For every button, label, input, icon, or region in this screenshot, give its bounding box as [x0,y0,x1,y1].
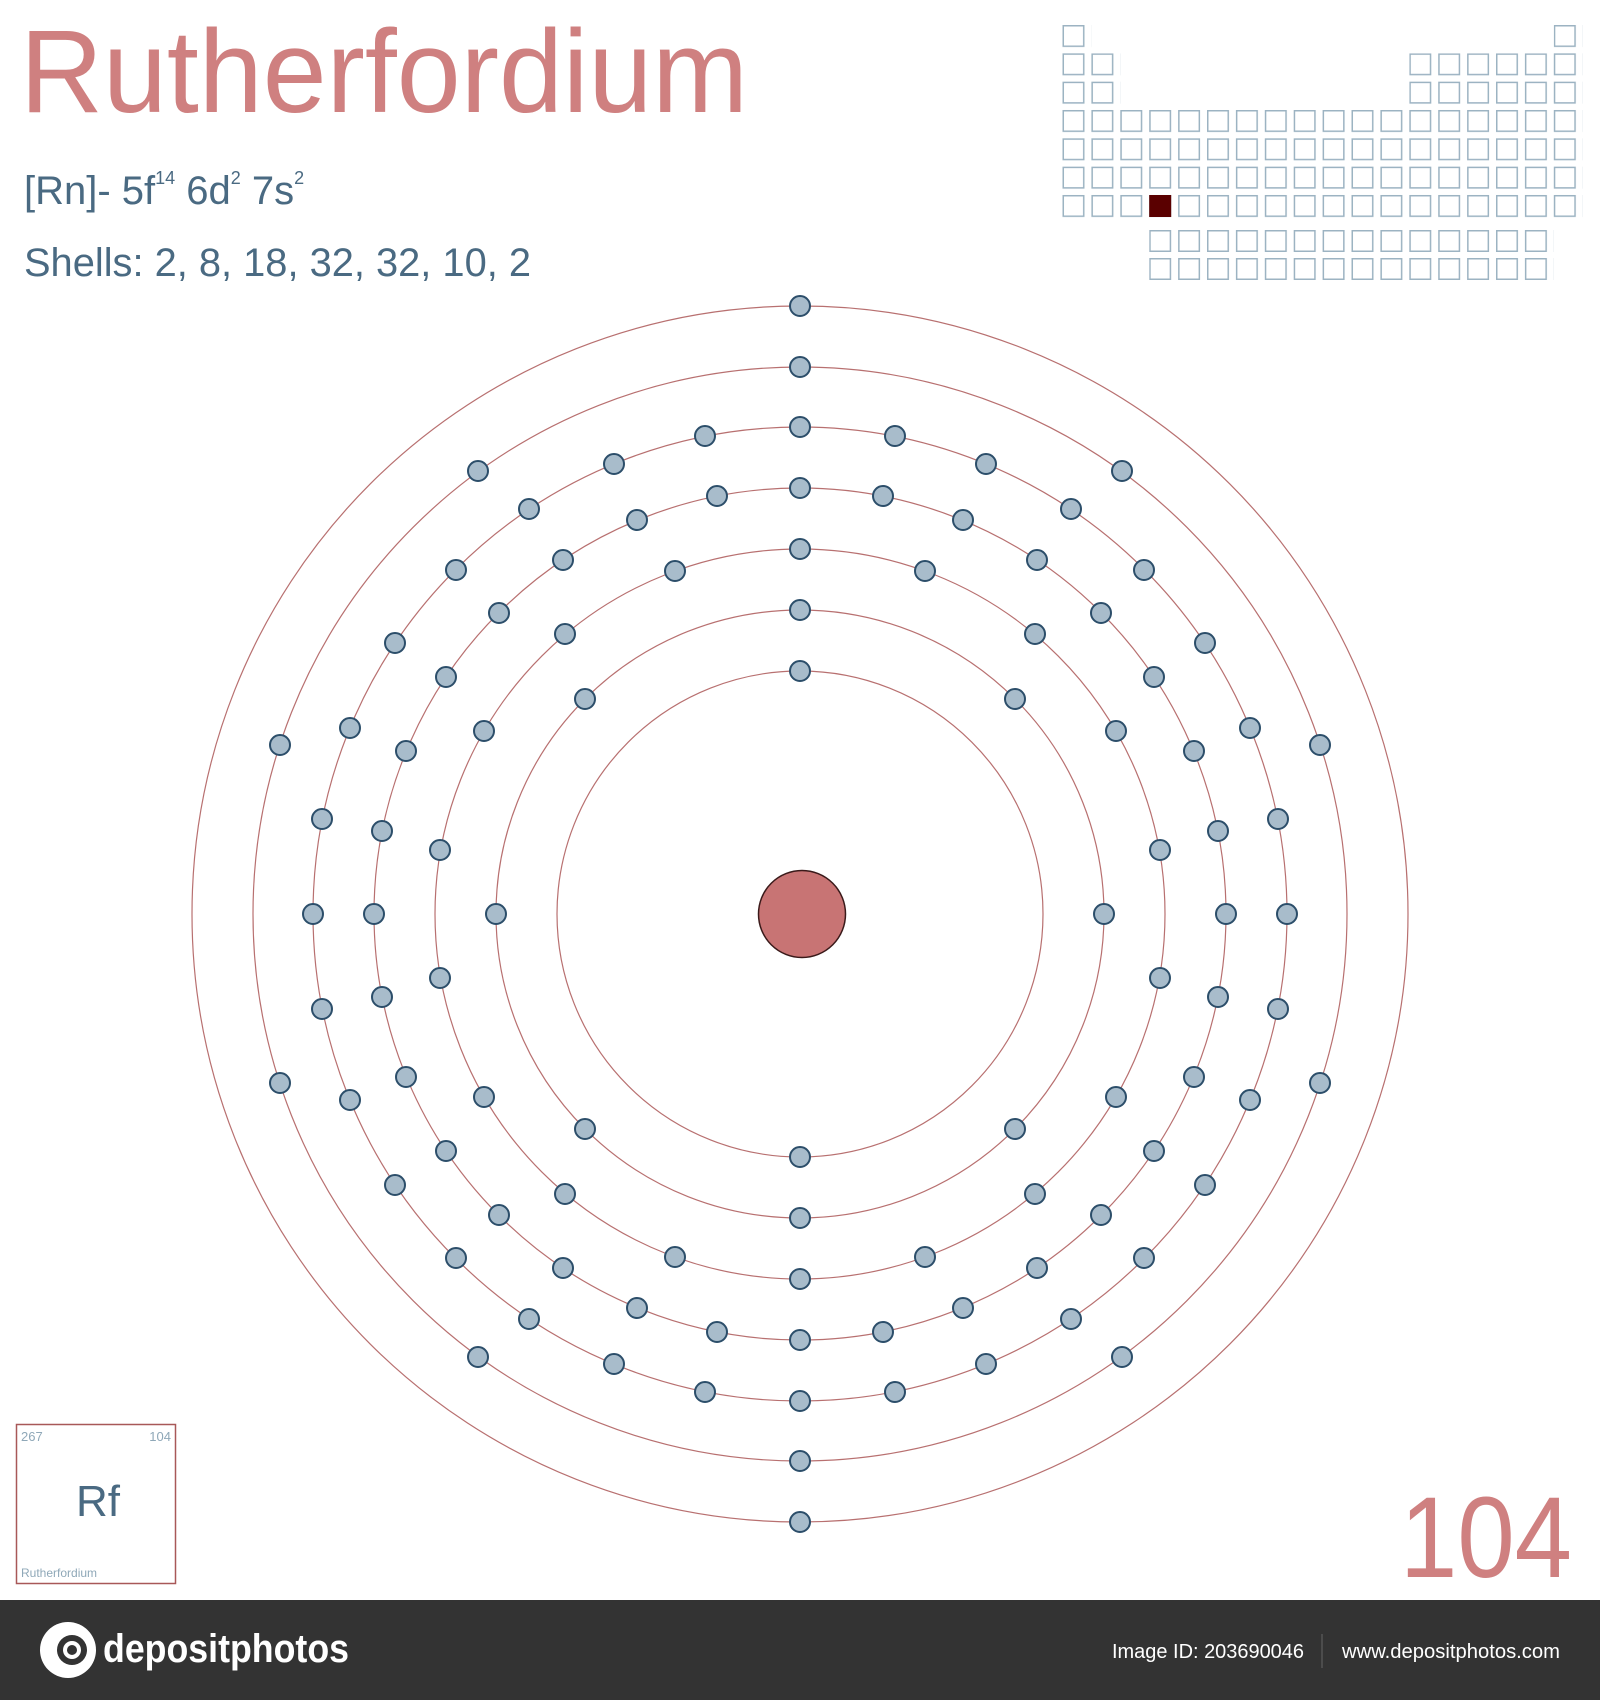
nucleus [758,870,846,958]
element tile: Rutherfordium [21,1566,97,1580]
element tile: 267 [21,1429,43,1444]
orbits [192,306,1408,1522]
shells text: Shells: 2, 8, 18, 32, 32, 10, 2 [24,241,531,285]
atomic number: 104 [1400,1474,1572,1602]
footer bar: depositphotos [103,1627,349,1671]
atom diagram [192,296,1408,1532]
periodic table [1062,25,1583,286]
footer bar: www.depositphotos.com [1341,1641,1560,1663]
electrons [270,296,1330,1532]
element tile: Rf [76,1477,121,1526]
electron configuration: 7s [241,169,294,213]
footer bar: Image ID: 203690046 [1112,1641,1304,1663]
footer bar [0,1600,1600,1700]
element tile: 104 [149,1429,171,1444]
icon: logo camera [40,1622,96,1678]
electron configuration: 14 [155,168,175,188]
electron configuration: 2 [294,168,304,188]
element tile [16,1424,176,1584]
electron configuration: 2 [231,168,241,188]
highlighted element cell [1149,195,1171,217]
electron configuration: [Rn]- 5f [24,169,155,213]
title: Rutherfordium [20,6,748,138]
electron configuration: 6d [175,169,231,213]
